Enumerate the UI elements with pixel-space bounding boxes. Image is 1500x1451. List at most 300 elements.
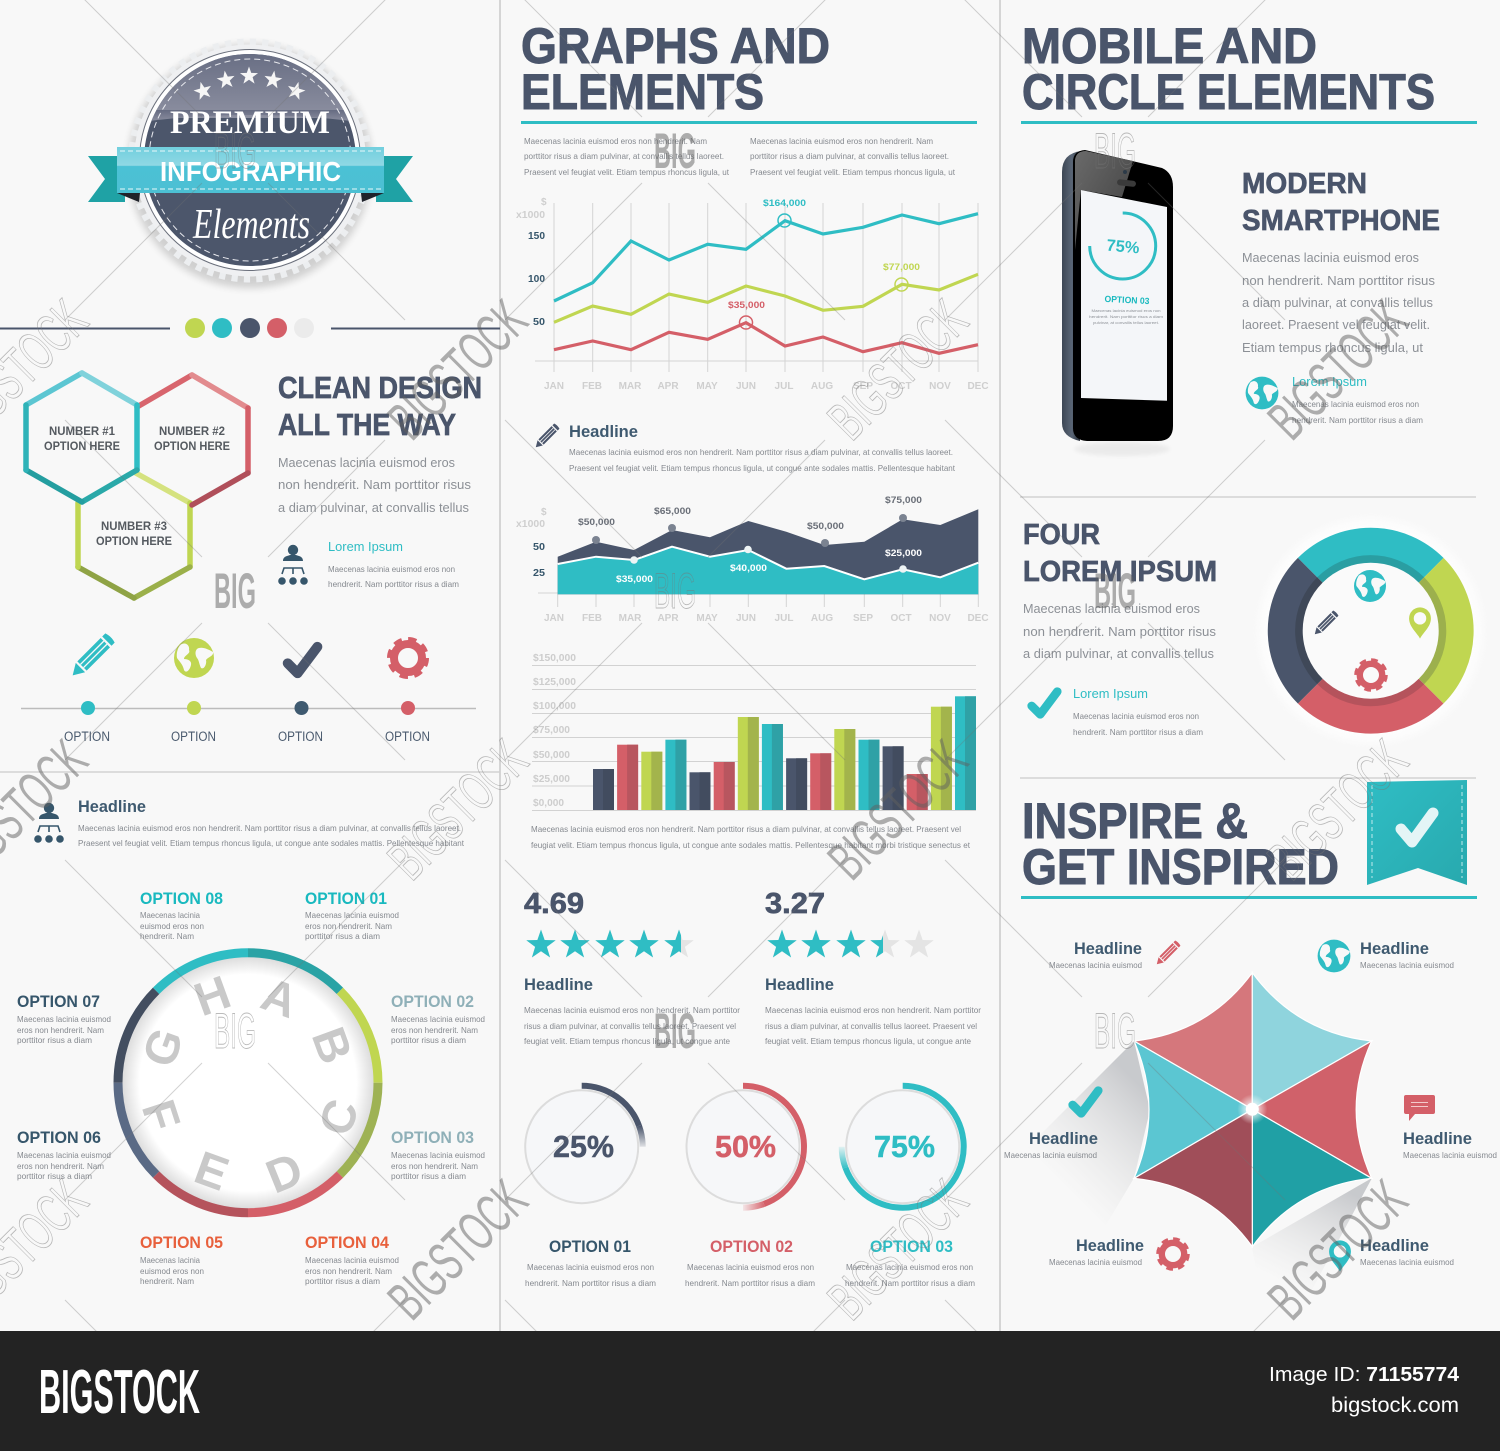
phone percent: 75%: [1106, 237, 1141, 257]
rating 4.69: [524, 888, 740, 1046]
footer bar: [0, 1331, 1500, 1451]
progress 25%: hendrerit. Nam porttitor risus a diam: [525, 1278, 656, 1288]
progress 25%: 25%: [553, 1129, 614, 1164]
area values: $40,000: [730, 563, 767, 574]
bar chart: [532, 652, 976, 810]
clean design paragraph: [278, 455, 471, 515]
ribbon tails: [88, 156, 413, 202]
option 03: Maecenas lacinia euismod: [391, 1150, 485, 1160]
month labels: DEC: [967, 381, 989, 392]
middle column panel: [516, 18, 989, 1288]
progress 75%: Maecenas lacinia euismod eros non: [846, 1262, 973, 1272]
four lorem paragraph: Maecenas lacinia euismod eros: [1023, 601, 1200, 616]
watermark BIGSTOCK marks: BIGSTOCK: [1256, 1168, 1419, 1331]
callout: top right: Maecenas lacinia euismod: [1360, 960, 1454, 970]
month labels: SEP: [853, 381, 873, 392]
icon: pencil: [1312, 610, 1339, 637]
watermark BIG marks: [214, 123, 1136, 1059]
rating 4.69: feugiat velit. Etiam tempus rhoncus ligula, ut congue ante: [524, 1036, 730, 1046]
icon timeline: [21, 633, 476, 744]
month labels: NOV: [929, 381, 951, 392]
option 01: eros non hendrerit. Nam: [305, 921, 392, 931]
ring letters: A: [255, 967, 305, 1028]
clean design paragraph: a diam pulvinar, at convallis tellus: [278, 500, 469, 515]
area months: AUG: [811, 613, 833, 624]
option 07: Maecenas lacinia euismod: [17, 1014, 111, 1024]
mobile heading: [1022, 18, 1435, 120]
progress 75%: OPTION 03: [870, 1238, 953, 1256]
watermark BIGSTOCK marks: BIGSTOCK: [816, 728, 979, 891]
icon: pin: [1409, 607, 1431, 639]
watermark BIG marks: BIG: [214, 563, 256, 619]
area y axis: $: [541, 507, 547, 518]
flag badge: [1367, 780, 1467, 885]
option 08: hendrerit. Nam: [140, 931, 194, 941]
timeline labels: OPTION: [278, 729, 323, 744]
area months: [544, 613, 989, 624]
icon: pencil: [533, 423, 560, 450]
area months: FEB: [582, 613, 602, 624]
area months: NOV: [929, 613, 951, 624]
progress 75%: hendrerit. Nam porttitor risus a diam: [845, 1278, 975, 1288]
progress 50%: Maecenas lacinia euismod eros non: [687, 1262, 814, 1272]
progress 50%: [685, 1086, 815, 1288]
rating 3.27: 3.27: [765, 888, 825, 920]
progress 75%: [842, 1086, 975, 1288]
progress 50%: OPTION 02: [710, 1238, 793, 1256]
phone text: hendrerit. Nam porttitor risus a diam: [1089, 314, 1164, 319]
option 06: OPTION 06: [17, 1129, 101, 1147]
data callouts: $164,000: [763, 198, 806, 209]
progress 50%: hendrerit. Nam porttitor risus a diam: [685, 1278, 815, 1288]
callout: bottom left: Maecenas lacinia euismod: [1049, 1257, 1142, 1267]
month labels: MAR: [619, 381, 642, 392]
intro text right: [750, 136, 956, 177]
left column panel: [0, 42, 500, 1286]
option 04: Maecenas lacinia euismod: [305, 1255, 399, 1265]
callout: bottom left: [1049, 1236, 1187, 1268]
lorem ipsum block: hendrerit. Nam porttitor risus a diam: [328, 579, 459, 589]
watermark BIG marks: BIG: [654, 123, 696, 179]
stars: [192, 66, 307, 101]
hexagon diagram: [26, 373, 248, 598]
intro text left: Praesent vel feugiat velit. Etiam tempus rhoncus ligula, ut: [524, 167, 730, 177]
rating 3.27: risus a diam pulvinar, at convallis tellus laoreet. Praesent vel: [765, 1021, 977, 1031]
ring letters: C: [308, 1093, 369, 1141]
callout: top right: [1318, 939, 1454, 972]
area values: $50,000: [807, 521, 844, 532]
option 02: [391, 993, 485, 1045]
option 02: OPTION 02: [391, 993, 474, 1011]
month labels: MAY: [696, 381, 718, 392]
timeline labels: [64, 729, 430, 744]
y axis labels: 150: [528, 230, 545, 242]
ring letters: D: [259, 1142, 310, 1203]
icon: gear: [1357, 661, 1385, 689]
smartphone paragraph: [1242, 250, 1435, 355]
callout: top left: [1049, 939, 1181, 970]
progress 25%: [525, 1086, 656, 1288]
ring letters: H: [187, 965, 237, 1026]
area values: $75,000: [885, 495, 922, 506]
option 04: OPTION 04: [305, 1234, 390, 1252]
bar axis labels: [533, 652, 576, 809]
option 08: euismod eros non: [140, 921, 204, 931]
option 06: [17, 1129, 111, 1181]
bar chart caption: feugiat velit. Etiam tempus rhoncus ligula, ut congue ante sodales mattis. Pellentesque habitant morbi tristique senectus et: [531, 840, 971, 850]
callout: bottom left: Headline: [1076, 1236, 1144, 1255]
month labels: JUN: [736, 381, 756, 392]
series: lime: [554, 274, 978, 322]
intro text right: porttitor risus a diam pulvinar, at convallis tellus laoreet.: [750, 151, 949, 161]
option 02: porttitor risus a diam: [391, 1035, 466, 1045]
hexagon labels: [44, 424, 230, 548]
icon: globe: [1246, 377, 1278, 409]
option 05: Maecenas lacinia: [140, 1255, 200, 1265]
watermark BIG marks: BIG: [214, 123, 256, 179]
area y axis: 25: [533, 567, 545, 579]
area months: JUL: [775, 613, 793, 624]
headline block: Maecenas lacinia euismod eros non hendrerit. Nam porttitor risus a diam pulvinar, at convallis tellus laoreet.: [78, 823, 461, 833]
ring diagram: [118, 953, 378, 1213]
inspire heading: [1022, 793, 1339, 895]
option 04: eros non hendrerit. Nam: [305, 1266, 392, 1276]
progress 25%: Maecenas lacinia euismod eros non: [527, 1262, 654, 1272]
area values: $35,000: [616, 574, 653, 585]
option 08: OPTION 08: [140, 890, 223, 908]
month labels: OCT: [890, 381, 912, 392]
phone option label: OPTION 03: [1104, 294, 1150, 306]
progress 25%: OPTION 01: [549, 1238, 631, 1256]
area values: [578, 495, 922, 585]
graphs heading: ELEMENTS: [521, 64, 764, 120]
intro text left: Maecenas lacinia euismod eros non hendrerit. Nam: [524, 136, 707, 146]
bar chart caption: [531, 824, 971, 850]
option 01: OPTION 01: [305, 890, 387, 908]
clean design paragraph: non hendrerit. Nam porttitor risus: [278, 477, 471, 492]
hexagon labels: OPTION HERE: [96, 534, 172, 548]
stars 3.27: [767, 930, 934, 958]
chart headline block: [569, 422, 956, 473]
bars: lime: [641, 707, 952, 810]
callout: left: Maecenas lacinia euismod: [1004, 1150, 1097, 1160]
rating 3.27: feugiat velit. Etiam tempus rhoncus ligula, ut congue ante: [765, 1036, 971, 1046]
intro text right: Praesent vel feugiat velit. Etiam tempus rhoncus ligula, ut: [750, 167, 956, 177]
ring letters: F: [132, 1093, 191, 1137]
mobile heading: CIRCLE ELEMENTS: [1022, 64, 1435, 120]
bars: teal: [665, 696, 976, 810]
option 02: Maecenas lacinia euismod: [391, 1014, 485, 1024]
bar axis labels: $100,000: [533, 700, 576, 712]
long shadows: [1020, 1041, 1372, 1312]
bar axis labels: $0,000: [533, 797, 564, 809]
smartphone heading: MODERN: [1242, 168, 1367, 200]
wedges: [1134, 973, 1372, 1247]
lorem ipsum block: Lorem Ipsum: [1292, 374, 1367, 389]
donut diagram: [1259, 519, 1483, 743]
watermark BIGSTOCK marks: BIGSTOCK: [376, 288, 539, 451]
data callouts: $77,000: [883, 262, 920, 273]
area values: $50,000: [578, 517, 615, 528]
graphs heading: [521, 18, 830, 120]
area months: SEP: [853, 613, 873, 624]
headline block: [78, 797, 465, 848]
ribbon: [117, 147, 384, 193]
month labels: FEB: [582, 381, 602, 392]
series: teal area: [558, 547, 978, 594]
option 03: OPTION 03: [391, 1129, 474, 1147]
watermark BIGSTOCK marks: BIGSTOCK: [376, 728, 539, 891]
callout: bottom right: Headline: [1360, 1236, 1429, 1255]
y axis labels: 50: [533, 316, 545, 328]
watermark BIGSTOCK marks: BIGSTOCK: [1256, 288, 1419, 451]
area months: DEC: [967, 613, 989, 624]
icon: globe: [174, 638, 214, 678]
callout: right: Headline: [1403, 1129, 1472, 1148]
headline block: Praesent vel feugiat velit. Etiam tempus rhoncus ligula, ut congue ante sodales mattis. Pellentesque habitant: [78, 838, 465, 848]
lorem ipsum block: Lorem Ipsum: [1073, 686, 1148, 701]
umbrella hexagon diagram: [1020, 973, 1372, 1312]
area chart: [516, 495, 989, 624]
footer bar: BIGSTOCK: [39, 1358, 200, 1427]
timeline labels: OPTION: [64, 729, 110, 744]
area months: JAN: [544, 613, 564, 624]
hexagon labels: NUMBER #3: [101, 519, 167, 533]
four lorem paragraph: non hendrerit. Nam porttitor risus: [1023, 624, 1216, 639]
smartphone heading: [1242, 168, 1440, 237]
chart headline block: Praesent vel feugiat velit. Etiam tempus rhoncus ligula, ut congue ante sodales mattis. Pellentesque habitant: [569, 463, 956, 473]
hexagon labels: NUMBER #2: [159, 424, 225, 438]
chart headline block: Headline: [569, 422, 638, 441]
phone text: pulvinar, at convallis tellus laoreet.: [1093, 320, 1159, 325]
smartphone paragraph: Maecenas lacinia euismod eros: [1242, 250, 1419, 265]
watermark overlay: BIG: [1094, 123, 1136, 179]
lorem ipsum block: Maecenas lacinia euismod eros non: [1292, 399, 1419, 409]
chart headline block: Maecenas lacinia euismod eros non hendrerit. Nam porttitor risus a diam pulvinar, at convallis tellus laoreet.: [569, 447, 953, 457]
intro text left: porttitor risus a diam pulvinar, at convallis tellus laoreet.: [524, 151, 724, 161]
phone text: [1089, 308, 1164, 325]
ring letters: B: [302, 1020, 363, 1070]
bar axis labels: $25,000: [533, 773, 570, 785]
icon: org chart: [278, 545, 308, 585]
lorem ipsum block: hendrerit. Nam porttitor risus a diam: [1073, 727, 1203, 737]
watermark BIGSTOCK marks: BIGSTOCK: [816, 1168, 979, 1331]
callout: bottom right: [1329, 1236, 1454, 1272]
option 07: OPTION 07: [17, 993, 100, 1011]
area months: JUN: [736, 613, 756, 624]
rating 4.69: Maecenas lacinia euismod eros non hendrerit. Nam porttitor: [524, 1005, 740, 1015]
hexagon 2: [137, 375, 248, 505]
y axis labels: [516, 197, 547, 328]
four lorem heading: LOREM IPSUM: [1023, 556, 1217, 588]
option 06: porttitor risus a diam: [17, 1171, 92, 1181]
y axis labels: x1000: [516, 210, 545, 221]
icon: gear: [390, 640, 426, 676]
timeline labels: OPTION: [171, 729, 216, 744]
hexagon labels: NUMBER #1: [49, 424, 115, 438]
callout: top left: Headline: [1074, 939, 1142, 958]
image id: Image ID: 71155774: [1269, 1364, 1460, 1386]
option 05: OPTION 05: [140, 1234, 223, 1252]
clean design heading: ALL THE WAY: [278, 407, 456, 442]
bar axis labels: $75,000: [533, 724, 570, 736]
callout: bottom right: Maecenas lacinia euismod: [1360, 1257, 1454, 1267]
option 05: hendrerit. Nam: [140, 1276, 194, 1286]
option 04: [305, 1234, 399, 1286]
option 03: porttitor risus a diam: [391, 1171, 466, 1181]
hexagon 3: [78, 472, 190, 598]
option 07: [17, 993, 111, 1045]
option 05: [140, 1234, 223, 1286]
icon: pencil: [68, 633, 115, 680]
ring letters: G: [131, 1021, 194, 1073]
bars: navy: [593, 746, 904, 810]
smartphone paragraph: non hendrerit. Nam porttitor risus: [1242, 273, 1435, 288]
hexagon 1: [26, 373, 137, 502]
bar axis labels: $150,000: [533, 652, 576, 664]
site url: bigstock.com: [1331, 1394, 1459, 1417]
area months: APR: [657, 613, 679, 624]
rating 3.27: Maecenas lacinia euismod eros non hendrerit. Nam porttitor: [765, 1005, 981, 1015]
watermark BIGSTOCK marks: [0, 288, 1419, 1331]
series: teal: [554, 214, 978, 301]
progress 75%: 75%: [874, 1129, 935, 1164]
four lorem heading: [1023, 519, 1217, 588]
progress 50%: 50%: [715, 1129, 776, 1164]
inspire heading: INSPIRE &: [1022, 793, 1248, 849]
bar axis labels: $50,000: [533, 749, 570, 761]
watermark overlay: BIG: [1094, 1003, 1136, 1059]
watermark BIG marks: BIG: [654, 1003, 696, 1059]
callout: top right: Headline: [1360, 939, 1429, 958]
four lorem paragraph: [1023, 601, 1216, 661]
colour palette divider: [0, 318, 500, 338]
month labels: JUL: [775, 381, 793, 392]
icon: globe: [1354, 570, 1386, 602]
watermark BIG marks: BIG: [214, 1003, 256, 1059]
callout: left: [1004, 1091, 1098, 1160]
callout: top left: Maecenas lacinia euismod: [1049, 960, 1142, 970]
rating 4.69: Headline: [524, 975, 593, 994]
option 08: [140, 890, 223, 941]
area values: $65,000: [654, 506, 691, 517]
smartphone heading: SMARTPHONE: [1242, 205, 1440, 237]
headline block: Headline: [78, 797, 146, 816]
badge title: elements: Elements: [192, 202, 310, 248]
bars: red: [617, 745, 928, 810]
callout: left: Headline: [1029, 1129, 1098, 1148]
clean design heading: CLEAN DESIGN: [278, 370, 482, 405]
area y axis: [516, 507, 547, 579]
lorem ipsum block: Maecenas lacinia euismod eros non: [1073, 711, 1199, 721]
lorem ipsum block: hendrerit. Nam porttitor risus a diam: [1292, 415, 1423, 425]
watermark BIG marks: BIG: [654, 563, 696, 619]
rating 3.27: Headline: [765, 975, 834, 994]
four lorem paragraph: a diam pulvinar, at convallis tellus: [1023, 646, 1214, 661]
option 03: eros non hendrerit. Nam: [391, 1161, 478, 1171]
area y axis: x1000: [516, 519, 545, 530]
stars 4.69: [526, 930, 694, 958]
lorem ipsum block: Lorem Ipsum: [328, 539, 403, 554]
phone progress ring: [1090, 213, 1156, 279]
y axis labels: 100: [528, 273, 545, 285]
line chart: [516, 197, 989, 392]
smartphone paragraph: a diam pulvinar, at convallis tellus: [1242, 295, 1433, 310]
ring letters: E: [188, 1140, 236, 1201]
watermark BIGSTOCK marks: BIGSTOCK: [1256, 728, 1419, 891]
lorem ipsum block: [1073, 686, 1203, 737]
area months: MAY: [696, 613, 718, 624]
data callouts: [728, 198, 920, 329]
area months: OCT: [890, 613, 912, 624]
hexagon labels: OPTION HERE: [154, 439, 230, 453]
option 01: porttitor risus a diam: [305, 931, 380, 941]
option 02: eros non hendrerit. Nam: [391, 1025, 478, 1035]
month labels: APR: [657, 381, 679, 392]
watermark BIGSTOCK marks: BIGSTOCK: [816, 288, 979, 451]
area values: $25,000: [885, 548, 922, 559]
smartphone paragraph: laoreet. Praesent vel feugiat velit.: [1242, 317, 1430, 332]
icon: check: [288, 647, 317, 673]
icon: check: [1032, 692, 1057, 714]
option 03: [391, 1129, 485, 1181]
watermark BIGSTOCK marks: BIGSTOCK: [376, 1168, 539, 1331]
option 01: [305, 890, 399, 941]
area markers: [592, 514, 907, 573]
right column panel: [1004, 18, 1497, 1312]
four lorem heading: FOUR: [1023, 519, 1100, 551]
mobile heading: MOBILE AND: [1022, 18, 1317, 74]
data callouts: $35,000: [728, 300, 765, 311]
smartphone: [1062, 150, 1173, 456]
intro text right: Maecenas lacinia euismod eros non hendrerit. Nam: [750, 136, 933, 146]
area months: MAR: [619, 613, 642, 624]
clean design paragraph: Maecenas lacinia euismod eros: [278, 455, 455, 470]
option 06: Maecenas lacinia euismod: [17, 1150, 111, 1160]
clean design heading: [278, 370, 482, 442]
bar chart caption: Maecenas lacinia euismod eros non hendrerit. Nam porttitor risus a diam pulvinar, at convallis tellus laoreet. Praesent vel: [531, 824, 961, 834]
intro text left: [524, 136, 730, 177]
hexagon labels: OPTION HERE: [44, 439, 120, 453]
badge title: premium: PREMIUM: [170, 105, 330, 141]
ring letters: [131, 965, 369, 1203]
month labels: [544, 381, 989, 392]
rating 3.27: [765, 888, 981, 1046]
y axis labels: $: [541, 197, 547, 208]
rating 4.69: risus a diam pulvinar, at convallis tellus laoreet. Praesent vel: [524, 1021, 736, 1031]
month labels: JAN: [544, 381, 564, 392]
premium badge: [88, 42, 413, 288]
option 06: eros non hendrerit. Nam: [17, 1161, 104, 1171]
lorem ipsum block: [328, 539, 459, 589]
graphs heading: GRAPHS AND: [521, 18, 830, 74]
callout: right: [1403, 1095, 1497, 1160]
option 01: Maecenas lacinia euismod: [305, 910, 399, 920]
rating 4.69: 4.69: [524, 888, 584, 920]
option 04: porttitor risus a diam: [305, 1276, 380, 1286]
option 07: eros non hendrerit. Nam: [17, 1025, 104, 1035]
option 07: porttitor risus a diam: [17, 1035, 92, 1045]
smartphone paragraph: Etiam tempus rhoncus ligula, ut: [1242, 340, 1423, 355]
phone text: Maecenas lacinia euismod eros non: [1092, 308, 1160, 313]
bar axis labels: $125,000: [533, 676, 576, 688]
series: navy area: [558, 509, 978, 594]
area y axis: 50: [533, 541, 545, 553]
series: red: [554, 323, 978, 353]
option 05: euismod eros non: [140, 1266, 204, 1276]
lorem ipsum block: Maecenas lacinia euismod eros non: [328, 564, 455, 574]
option 08: Maecenas lacinia: [140, 910, 200, 920]
